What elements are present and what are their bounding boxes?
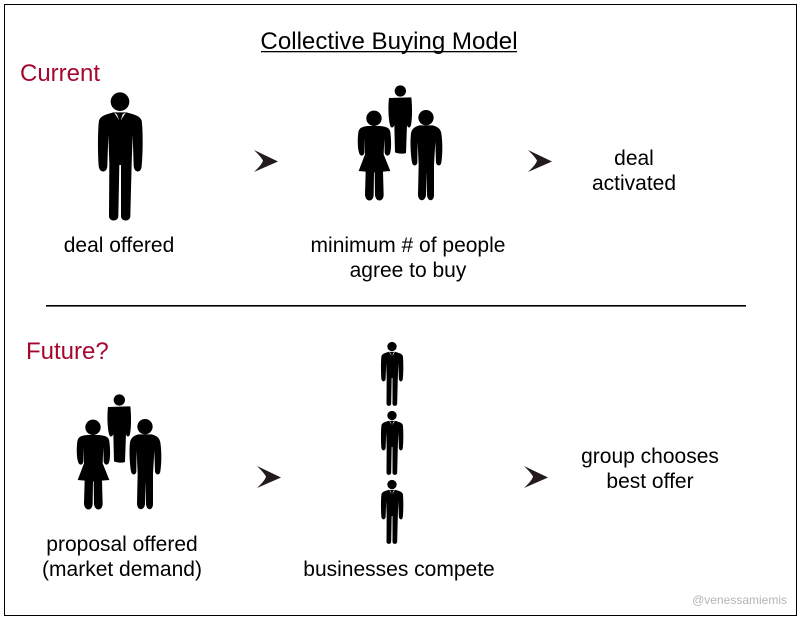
label: minimum # of people agree to buy: minimum # of people <box>311 234 505 257</box>
icon: group of people, proposal <box>77 394 161 509</box>
icon: competing business 1 <box>381 342 403 406</box>
label: businesses compete: businesses compete <box>303 558 495 581</box>
icon: businessman, deal offered <box>98 92 143 220</box>
label: deal activated: deal <box>614 147 654 170</box>
label: minimum # of people agree to buy: agree to buy <box>350 259 467 282</box>
divider <box>46 305 746 307</box>
icon: competing business 3 <box>381 480 403 544</box>
label: deal offered: deal offered <box>64 234 174 257</box>
title: Collective Buying Model <box>260 28 518 55</box>
watermark: @venessamiemis <box>692 593 787 607</box>
icon: competing business 2 <box>381 411 403 475</box>
label: proposal offered (market demand): proposal offered <box>46 533 198 556</box>
arrow: current step 1 to step 2 <box>254 150 278 172</box>
heading: Current: Current <box>20 60 100 87</box>
heading: Future?: Future? <box>26 338 109 365</box>
label: group chooses best offer: best offer <box>606 470 694 493</box>
arrow: current step 2 to step 3 <box>528 150 552 172</box>
arrow: future step 1 to step 2 <box>257 466 281 488</box>
icon: group of people, minimum agree <box>358 85 442 200</box>
label: group chooses best offer: group chooses <box>581 445 719 468</box>
label: proposal offered (market demand): (market demand) <box>42 558 202 581</box>
arrow: future step 2 to step 3 <box>524 466 548 488</box>
label: deal activated: activated <box>592 172 676 195</box>
